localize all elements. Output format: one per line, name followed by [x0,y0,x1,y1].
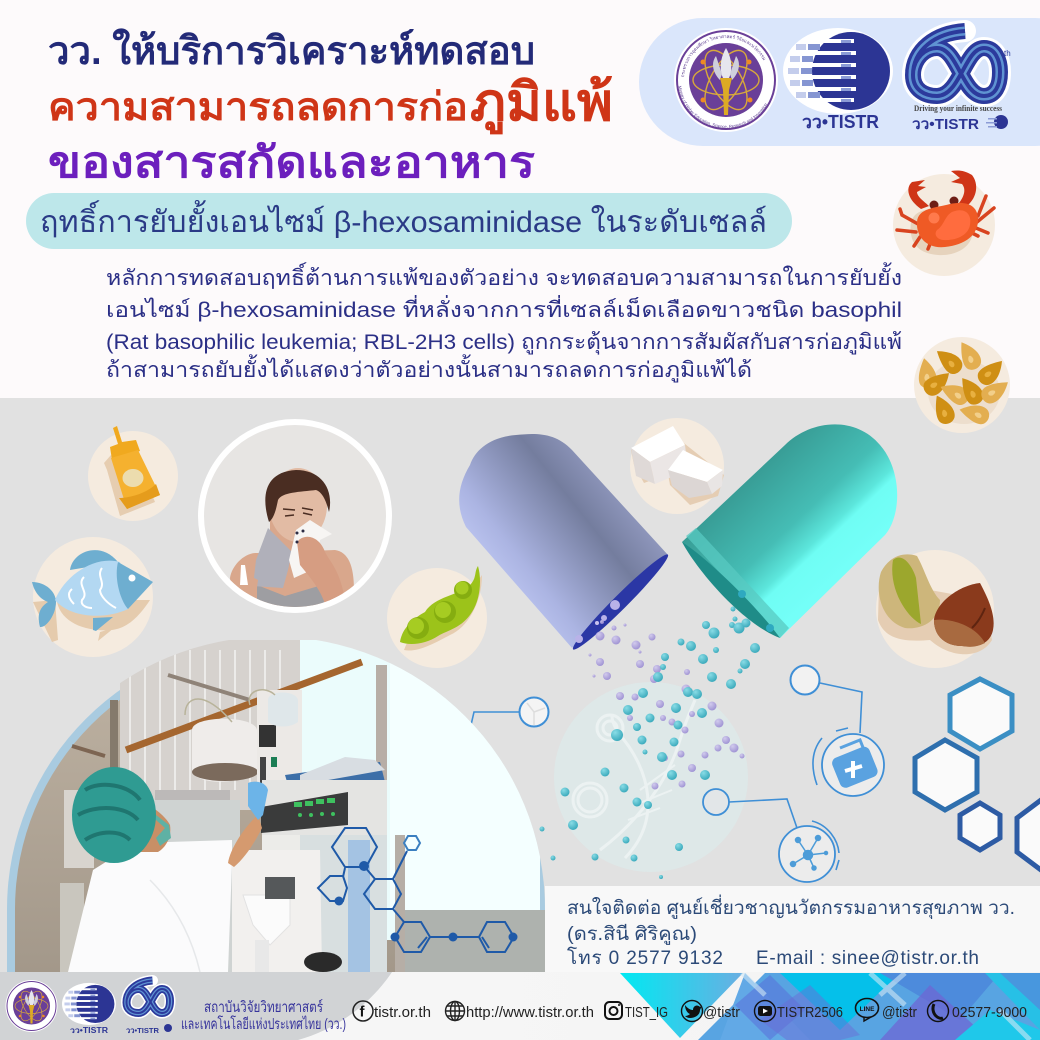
logo: 60th anniversary: วว•TISTR [912,116,979,133]
title: ของสารสกัดและอาหาร [48,139,535,187]
logo panel [639,18,1040,146]
connector: medical kit [790,666,884,796]
icon: mustard bottle [88,426,178,521]
contact: youtube: TISTR2506 [777,1005,843,1021]
title: ภูมิแพ้ [470,74,613,135]
subtitle pill: ฤทธิ์การยับยั้งเอนไซม์ β-hexosaminidase ในระดับเซลล์ [40,200,767,239]
body text: หลักการทดสอบฤทธิ์ต้านการแพ้ของตัวอย่าง จะทดสอบความสามารถในการยับยั้ง [106,262,902,290]
icon: seeds [914,337,1013,433]
logo: ministry seal [674,28,778,132]
footer organisation name [181,999,346,1033]
icon: nuts [876,550,994,668]
contact: instagram: TIST_IG [625,1005,668,1021]
contact: twitter [682,1000,740,1022]
title: ความสามารถลดการก่อ [48,86,468,129]
contact: twitter: @tistr [703,1005,740,1021]
contact: facebook [353,1001,431,1021]
logo: TISTR [783,28,893,132]
body text: ถ้าสามารถยับยั้งได้แสดงว่าตัวอย่างนั้นสามารถลดการก่อภูมิแพ้ได้ [106,354,752,383]
contact: facebook: tistr.or.th [374,1005,431,1021]
body text: เอนไซม์ β-hexosaminidase ที่หลั่งจากการที่เซลล์เม็ดเลือดขาวชนิด basophil [106,295,902,322]
contact panel: สนใจติดต่อ ศูนย์เชี่ยวชาญนวัตกรรมอาหารสุขภาพ วว. [567,894,1015,920]
footer pattern [620,973,1040,1040]
logo: 60th anniversary [912,31,1011,133]
footer organisation name: และเทคโนโลยีแห่งประเทศไทย (วว.) [181,1015,346,1033]
footer logos: วว•TISTR [126,1026,160,1035]
capsule: teal half [682,424,897,638]
body text: (Rat basophilic leukemia; RBL-2H3 cells) ถูกกระตุ้นจากการสัมผัสกับสารก่อภูมิแพ้ [106,330,902,355]
contact: line [856,998,917,1021]
contact: youtube [754,1000,843,1022]
particles [540,606,760,879]
icon: crab [893,170,995,276]
logo: ministry seal: กระทรวงการอุดมศึกษา วิทยาศาสตร์ วิจัยและนวัตกรรม [682,34,766,77]
connector: lab [471,698,548,726]
contact: facebook: f [360,1004,366,1020]
contact panel [545,886,1040,973]
hexagons [915,679,1040,870]
title [48,28,613,187]
connector: network [703,789,839,882]
photo: lab researcher [7,640,545,972]
contact: instagram [605,1002,668,1021]
footer logos: วว•TISTR [70,1026,108,1035]
contact: line: LINE [860,1006,875,1013]
contact: phone [928,1000,1027,1022]
contact: website [446,1002,594,1021]
logo: TISTR: วว•TISTR [802,112,879,132]
footer organisation name: สถาบันวิจัยวิทยาศาสตร์ [204,999,323,1016]
icon: sugar cubes [630,418,724,514]
body text [106,262,902,383]
logo: ministry seal: Ministry of Higher Education, Science, Research and Innovation [678,86,767,128]
subtitle pill [26,193,792,249]
icon: soybean [387,566,487,668]
contact: line: @tistr [882,1005,917,1021]
molecule overlay [318,828,518,952]
footer band [0,972,1040,1040]
logo: 60th anniversary: th [1004,49,1011,58]
contact panel: (ดร.สินี ศิริคูณ) [567,923,697,945]
grey lower band [0,398,1040,973]
icon: fish [32,537,153,657]
capsule: purple half [459,434,673,654]
page background [0,0,1040,398]
footer logos [6,980,172,1035]
contact: phone: 02577-9000 [952,1005,1027,1021]
contact panel: โทร 0 2577 9132 [567,946,723,969]
title: วว. ให้บริการวิเคราะห์ทดสอบ [48,28,535,73]
sphere: DNA globe [554,682,748,872]
contact panel: E-mail : sinee@tistr.or.th [756,948,979,969]
contact: website: http://www.tistr.or.th [466,1005,594,1021]
photo: woman sneezing [201,422,389,625]
logo: 60th anniversary: Driving your infinite success [914,103,1003,113]
